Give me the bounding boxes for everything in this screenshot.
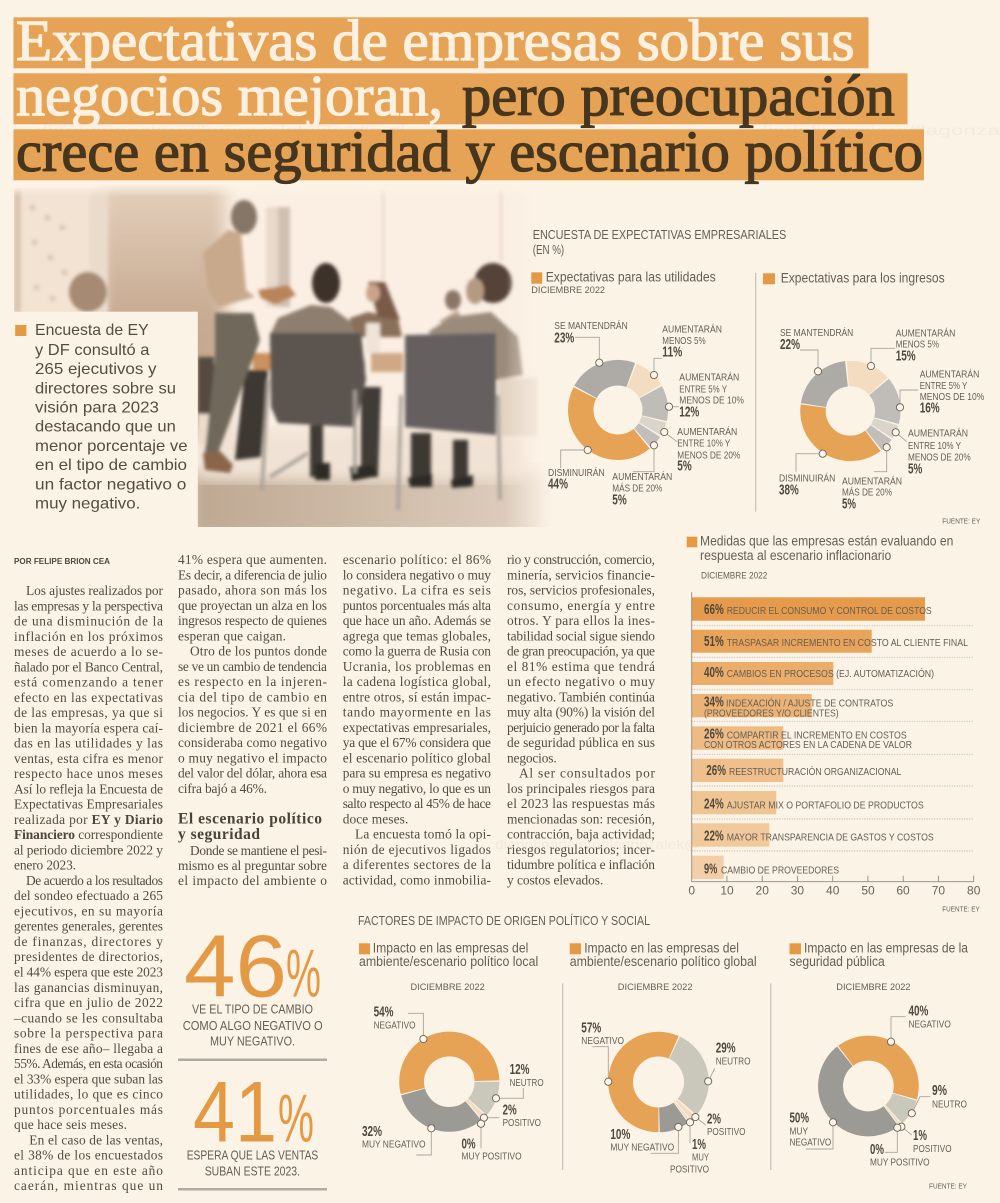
text block: column 1: las ganancias disminuyan, xyxy=(14,980,163,995)
panel: bar chart medidas: Medidas que las empresas están evaluando en xyxy=(700,534,953,549)
text block: column 1: gerentes generales, gerentes xyxy=(14,919,163,934)
text block: column 1: 55%. Además, en esta ocasión xyxy=(14,1056,163,1071)
text block: column 1: Expectativas Empresariales xyxy=(14,797,163,812)
text block: column 2: mismo es al preguntar sobre xyxy=(178,858,327,873)
stat: 46%: COMO ALGO NEGATIVO O xyxy=(183,1019,323,1033)
panel: impacto político local: MUY POSITIVO xyxy=(462,1150,522,1162)
stat: 46% xyxy=(178,917,327,1061)
text block: column 4: el 2023 las respuestas más xyxy=(507,796,655,811)
text block: column 1: efecto en las expectativas xyxy=(14,690,163,705)
byline: POR FELIPE BRION CEA xyxy=(14,556,110,566)
panel: expectativas para las utilidades: ENTRE 10% Y xyxy=(677,438,730,450)
text block: column 4: ros, servicios profesionales, xyxy=(507,582,655,598)
panel: bar chart medidas: 51% xyxy=(704,634,724,650)
text block: column 1: las empresas y la perspectiva xyxy=(14,598,163,613)
panel: expectativas para los ingresos: AUMENTARÁN xyxy=(896,327,955,340)
panel: expectativas para las utilidades: AUMENTARÁN xyxy=(662,322,722,335)
panel: bar chart medidas: 26% xyxy=(704,726,724,742)
panel: expectativas para los ingresos: Expectativas para los ingresos xyxy=(781,271,945,286)
text block: column 1: de finanzas, directores y xyxy=(14,934,163,949)
panel: expectativas para los ingresos: SE MANTENDRÁN xyxy=(780,326,853,339)
text block: column 1: al periodo diciembre 2022 y xyxy=(14,842,163,857)
panel: impacto político local: DICIEMBRE 2022 xyxy=(410,982,485,993)
panel: impacto político local: NEUTRO xyxy=(510,1077,544,1089)
panel: bar chart medidas: 22% xyxy=(704,829,724,845)
panel: expectativas para las utilidades: MENOS DE 10% xyxy=(679,394,744,406)
title xyxy=(14,8,924,184)
text block: column 3: que hace un año. Además se xyxy=(343,613,491,628)
panel: bar chart medidas: INDEXACIÓN / AJUSTE DE CONTRATOS xyxy=(726,697,893,710)
panel: bar chart medidas: FUENTE: EY xyxy=(942,905,980,914)
text block: column 1: sobre la perspectiva para xyxy=(14,1026,163,1040)
panel: impacto seguridad pública xyxy=(770,941,968,1190)
panel: impacto político local: 0% xyxy=(462,1136,476,1152)
panel: impacto político local: 2% xyxy=(503,1102,517,1118)
panel: impacto seguridad pública: 1% xyxy=(913,1128,927,1144)
panel: expectativas para los ingresos: DISMINUIRÁN xyxy=(779,472,835,485)
panel: expectativas para los ingresos: 16% xyxy=(920,400,940,416)
text block: column 1: Así lo refleja la Encuesta de xyxy=(14,781,163,796)
panel: expectativas para las utilidades: ENTRE 5% Y xyxy=(679,383,727,395)
panel: impacto político global: POSITIVO xyxy=(707,1126,746,1138)
callout: survey summary: y DF consultó a xyxy=(35,342,150,359)
text block: column 4: los principales riesgos para xyxy=(507,781,655,796)
heading: el escenario político y seguridad: y seguridad xyxy=(178,826,260,843)
text block: column 4: rio y construcción, comercio, xyxy=(507,552,655,567)
panel: impacto político local: Impacto en las empresas del xyxy=(373,941,528,956)
panel: bar chart medidas: 70 xyxy=(932,883,945,897)
panel: expectativas para las utilidades: DISMINUIRÁN xyxy=(548,466,605,479)
faint watermark: diariofinanciero#lagonza xyxy=(755,122,1000,138)
text block: column 3: para su empresa es negativo xyxy=(343,766,491,781)
panel: impacto político global: 57% xyxy=(581,1020,601,1036)
panel: expectativas para los ingresos: MENOS DE 10% xyxy=(920,391,984,403)
panel: expectativas para las utilidades: MÁS DE 20% xyxy=(612,482,662,495)
panel: bar chart medidas: 0 xyxy=(688,883,695,897)
panel: bar chart medidas: COMPARTIR EL INCREMENTO EN COSTOS xyxy=(727,729,907,741)
heading: encuesta de expectativas: ENCUESTA DE EXPECTATIVAS EMPRESARIALES xyxy=(533,228,786,242)
text block: column 3: o muy negativo, lo que es un xyxy=(343,781,491,796)
text block: column 4: riesgos regulatorios; incer- xyxy=(507,842,655,857)
text block: column 2: diciembre de 2021 el 66% xyxy=(178,720,327,735)
text block: column 4: de seguridad pública en sus xyxy=(507,735,655,750)
text block: column 1: el 44% espera que este 2023 xyxy=(14,964,163,980)
stat: 41%: SUBAN ESTE 2023. xyxy=(205,1164,300,1178)
stat: 46%: VE EL TIPO DE CAMBIO xyxy=(192,1002,313,1016)
heading: factores de impacto: FACTORES DE IMPACTO DE ORIGEN POLÍTICO Y SOCIAL xyxy=(358,913,650,928)
text block: column 2: ingresos respecto de quienes xyxy=(178,613,327,628)
stat: 46%: MUY NEGATIVO. xyxy=(210,1035,295,1049)
text block: column 1: respecto hace unos meses xyxy=(14,766,163,781)
panel: impacto político local: ambiente/escenario político local xyxy=(359,954,538,969)
stat: 41%: ESPERA QUE LAS VENTAS xyxy=(187,1148,318,1162)
text block: column 3: doce meses. xyxy=(343,811,408,826)
text block: column 2: que proyectan un alza en los xyxy=(178,598,327,613)
text block: column 3: lo considera negativo o muy xyxy=(343,567,491,582)
panel: expectativas para las utilidades: Expectativas para las utilidades xyxy=(546,270,716,285)
panel: expectativas para los ingresos: ENTRE 5% Y xyxy=(920,380,967,392)
text block: column 2: consideraba como negativo xyxy=(178,735,327,750)
text block: column 1: inflación en los próximos xyxy=(14,629,163,644)
panel: impacto seguridad pública: 0% xyxy=(870,1142,884,1158)
text block: column 1: ejecutivos, en su mayoría xyxy=(14,904,163,918)
text block: column 1: realizada por EY y Diario xyxy=(14,812,163,827)
panel: impacto seguridad pública: 40% xyxy=(908,1004,928,1020)
panel: impacto político global: ambiente/escenario político global xyxy=(570,954,757,969)
text block: column 2: del valor del dólar, ahora esa xyxy=(178,766,327,781)
panel: expectativas para las utilidades: 23% xyxy=(554,330,574,346)
text block: column 4: Al ser consultados por xyxy=(519,766,656,781)
stat: 41% xyxy=(178,1065,327,1190)
heading: encuesta de expectativas xyxy=(533,228,786,257)
panel: expectativas para los ingresos: AUMENTARÁN xyxy=(842,474,902,487)
panel: bar chart medidas: 40 xyxy=(826,883,840,897)
callout: survey summary: Encuesta de EY xyxy=(35,322,149,339)
title: negocios mejoran, xyxy=(16,63,443,128)
text block: column 2: el impacto del ambiente o xyxy=(178,873,327,888)
panel: expectativas para los ingresos: 22% xyxy=(780,337,800,353)
text block: column 1: bien la mayoría espera caí- xyxy=(14,720,163,735)
text block: column 4: tidumbre política e inflación xyxy=(507,857,655,872)
panel: impacto seguridad pública: NEUTRO xyxy=(932,1099,967,1111)
text block: column 1: de las empresas, ya que si xyxy=(14,705,163,720)
text block: column 1 xyxy=(13,583,164,1193)
text block: column 3: actividad, como inmobilia- xyxy=(343,872,491,888)
text block: column 2: o muy negativo el impacto xyxy=(178,750,327,765)
text block: column 1: caerán, mientras que un xyxy=(14,1178,163,1193)
panel: expectativas para las utilidades: SE MANTENDRÁN xyxy=(554,319,628,332)
text block: column 1: el 38% de los encuestados xyxy=(14,1148,163,1163)
panel: impacto político local: MUY NEGATIVO xyxy=(362,1138,426,1150)
text block: column 1: presidentes de directorios, xyxy=(14,949,163,964)
text block: column 1: que hace seis meses. xyxy=(14,1117,127,1132)
text block: column 1: ñalado por el Banco Central, xyxy=(14,659,163,674)
panel: impacto seguridad pública: NEGATIVO xyxy=(790,1137,831,1149)
panel: bar chart medidas: respuesta al escenario inflacionario xyxy=(700,548,891,563)
panel: impacto seguridad pública: MUY xyxy=(790,1125,808,1137)
panel: impacto político global xyxy=(562,941,757,1175)
text block: column 2: pasado, ahora son más los xyxy=(178,582,327,598)
panel: expectativas para las utilidades: 12% xyxy=(679,404,699,420)
text block: column 4: mencionadas son: recesión, xyxy=(507,811,655,826)
text block: column 3 xyxy=(343,552,491,888)
stat: 46%: % xyxy=(286,936,321,1012)
text block: column 3: Ucrania, los problemas en xyxy=(343,659,491,674)
text block: column 2 xyxy=(178,552,327,888)
text block: column 2: Donde se mantiene el pesi- xyxy=(190,843,327,858)
panel: impacto seguridad pública: 9% xyxy=(932,1083,947,1099)
callout: survey summary: menor porcentaje ve xyxy=(35,438,188,455)
panel: expectativas para las utilidades: 5% xyxy=(677,459,692,475)
panel: bar chart medidas: CON OTROS ACTORES EN LA CADENA DE VALOR xyxy=(704,739,912,751)
text block: column 1: fines de ese año– llegaba a xyxy=(14,1041,163,1056)
panel: bar chart medidas: 66% xyxy=(704,602,724,618)
text block: column 1: del sondeo efectuado a 265 xyxy=(14,888,163,903)
text block: column 3: como la guerra de Rusia con xyxy=(343,644,491,659)
panel: bar chart medidas: CAMBIOS EN PROCESOS (EJ. AUTOMATIZACIÓN) xyxy=(727,667,934,680)
text block: column 2: se ve un cambio de tendencia xyxy=(178,659,327,674)
panel: impacto político global: POSITIVO xyxy=(670,1163,709,1175)
panel: bar chart medidas: AJUSTAR MIX O PORTAFOLIO DE PRODUCTOS xyxy=(727,799,924,811)
panel: expectativas para las utilidades: AUMENTARÁN xyxy=(677,425,737,438)
text block: column 4: negocios. xyxy=(507,750,557,765)
faint watermark: diariofinanciero#lagonzalek@ xyxy=(495,836,700,852)
text block: column 3: expectativas empresariales, xyxy=(343,720,491,735)
text block: column 3: a diferentes sectores de la xyxy=(343,857,491,872)
text block: column 1: cifra que en julio de 2022 xyxy=(14,995,163,1010)
panel: bar chart medidas: 20 xyxy=(756,883,769,897)
panel: expectativas para las utilidades: 5% xyxy=(612,492,627,508)
panel: expectativas para los ingresos: FUENTE: EY xyxy=(942,517,980,526)
callout: survey summary: un factor negativo o xyxy=(35,476,186,493)
panel: expectativas para las utilidades: 44% xyxy=(548,476,568,492)
panel: expectativas para las utilidades xyxy=(531,270,744,508)
stat: 41%: % xyxy=(278,1081,314,1157)
panel: bar chart medidas: 60 xyxy=(896,883,910,897)
text block: column 1: el 33% espera que suban las xyxy=(14,1071,163,1086)
text block: column 1: meses de acuerdo a lo se- xyxy=(14,644,163,659)
panel: expectativas para los ingresos: 38% xyxy=(779,482,799,498)
text block: column 1: ventas, esta cifra es menor xyxy=(14,751,164,766)
panel: bar chart medidas: MAYOR TRANSPARENCIA DE GASTOS Y COSTOS xyxy=(727,832,934,844)
panel: expectativas para las utilidades: AUMENTARÁN xyxy=(612,470,672,483)
text block: column 4: otros. Y para ellos la ines- xyxy=(507,613,655,628)
panel: expectativas para las utilidades: MENOS DE 20% xyxy=(677,449,740,461)
panel: impacto político global: MUY NEGATIVO xyxy=(610,1142,674,1154)
text block: column 1: Los ajustes realizados por xyxy=(26,583,164,598)
panel: expectativas para las utilidades: AUMENTARÁN xyxy=(679,371,739,384)
panel: impacto seguridad pública: POSITIVO xyxy=(913,1143,952,1155)
panel: expectativas para las utilidades: DICIEMBRE 2022 xyxy=(531,285,605,296)
text block: column 1: de una disminución de la xyxy=(14,614,163,628)
panel: bar chart medidas: 24% xyxy=(704,796,724,812)
callout: survey summary: en el tipo de cambio xyxy=(35,457,187,474)
text block: column 4: un efecto negativo o muy xyxy=(507,674,655,689)
panel: impacto político local: 12% xyxy=(510,1062,530,1078)
panel: impacto seguridad pública: Impacto en las empresas de la xyxy=(804,941,968,956)
text block: column 3: agrega que temas globales, xyxy=(343,628,491,643)
panel: impacto político local: NEGATIVO xyxy=(374,1019,416,1031)
panel: impacto seguridad pública: MUY POSITIVO xyxy=(870,1157,930,1169)
text block: column 3: escenario político: el 86% xyxy=(343,552,491,567)
text block: column 3: La encuesta tomó la opi- xyxy=(355,827,491,842)
text block: column 4: negativo. También continúa xyxy=(507,689,655,704)
text block: column 2: cifra bajó a 46%. xyxy=(178,781,267,796)
text block: column 3: tando mayormente en las xyxy=(343,705,491,720)
panel: expectativas para los ingresos: ENTRE 10% Y xyxy=(908,440,961,452)
callout: survey summary: muy negativo. xyxy=(35,495,140,512)
text block: column 4: contracción, baja actividad; xyxy=(507,827,655,842)
panel: expectativas para los ingresos: 5% xyxy=(842,496,856,512)
panel: expectativas para los ingresos: AUMENTARÁN xyxy=(908,427,968,440)
text block: column 4: muy alta (90%) la visión del xyxy=(507,705,655,720)
panel: expectativas para los ingresos: 15% xyxy=(896,349,916,365)
panel: impacto político local: 54% xyxy=(374,1005,394,1021)
callout: survey summary: visión para 2023 xyxy=(35,400,159,417)
panel: impacto político global: NEGATIVO xyxy=(581,1035,624,1047)
text block: column 2: cia del tipo de cambio en xyxy=(178,689,327,704)
stat: 46%: 46 xyxy=(184,917,287,1016)
text block: column 2: Es decir, a diferencia de julio xyxy=(178,567,327,582)
text block: column 4: de gran preocupación, ya que xyxy=(507,644,655,659)
panel: bar chart medidas: (PROVEEDORES Y/O CLIENTES) xyxy=(704,708,839,720)
text block: column 4 xyxy=(507,552,656,888)
text block: column 2: es respecto en la injeren- xyxy=(178,674,327,689)
text block: column 4: minería, servicios financie- xyxy=(507,567,655,582)
text block: column 1: puntos porcentuales más xyxy=(14,1102,163,1117)
panel: impacto político global: 2% xyxy=(707,1111,721,1127)
title: crece en seguridad y escenario político xyxy=(16,119,923,184)
panel: impacto seguridad pública: FUENTE: EY xyxy=(929,1181,967,1190)
text block: column 3: puntos porcentuales más alta xyxy=(343,598,491,613)
heading: encuesta de expectativas: (EN %) xyxy=(533,243,564,257)
panel: bar chart medidas: 26% xyxy=(706,763,726,779)
panel: impacto político global: Impacto en las empresas del xyxy=(584,941,739,956)
text block: column 3: nión de ejecutivos ligados xyxy=(343,842,491,857)
text block: column 4: el 81% estima que tendrá xyxy=(507,659,655,674)
panel: expectativas para los ingresos: MENOS 5% xyxy=(896,339,939,351)
panel: expectativas para los ingresos: MÁS DE 20% xyxy=(842,486,892,499)
panel: bar chart medidas: REESTRUCTURACIÓN ORGANIZACIONAL xyxy=(729,765,901,778)
text block: column 1: está comenzando a tener xyxy=(14,675,164,690)
panel: bar chart medidas xyxy=(687,534,981,914)
panel: impacto político global: DICIEMBRE 2022 xyxy=(618,982,692,993)
callout: survey summary: destacando que un xyxy=(35,419,176,436)
panel: impacto seguridad pública: DICIEMBRE 2022 xyxy=(836,982,910,993)
panel: bar chart medidas: 30 xyxy=(791,883,804,897)
faint watermark xyxy=(35,122,1000,852)
panel: impacto seguridad pública: NEGATIVO xyxy=(908,1018,951,1030)
callout: survey summary: 265 ejecutivos y xyxy=(35,361,156,378)
panel: impacto seguridad pública: seguridad pública xyxy=(790,954,885,969)
panel: expectativas para las utilidades: 11% xyxy=(662,345,682,361)
text block: column 1: enero 2023. xyxy=(14,858,76,873)
faint watermark: diariofinanciero#lagonzalek@e-dip.cl xyxy=(35,122,405,138)
text block: column 2: los negocios. Y es que si en xyxy=(178,705,327,720)
text block: column 3: salto respecto al 45% de hace xyxy=(343,796,491,811)
text block: column 1: –cuando se les consultaba xyxy=(13,1010,163,1025)
text block: column 4: y costos elevados. xyxy=(507,872,603,888)
text block: column 2: 41% espera que aumenten. xyxy=(178,552,327,567)
text block: column 2: esperan que caigan. xyxy=(178,628,286,643)
heading: el escenario político y seguridad xyxy=(178,810,322,843)
text block: column 3: negativo. La cifra es seis xyxy=(343,582,491,598)
text block: column 3: entre otros, sí están impac- xyxy=(343,689,491,704)
panel: expectativas para los ingresos xyxy=(755,271,984,526)
title: pero preocupación xyxy=(462,63,895,128)
panel: impacto político global: 10% xyxy=(610,1127,630,1143)
panel: bar chart medidas: 40% xyxy=(704,665,724,681)
panel: impacto político local xyxy=(359,941,544,1162)
panel: impacto político local: POSITIVO xyxy=(503,1117,541,1129)
text block: column 3: ya que el 67% considera que xyxy=(343,735,491,750)
text block: column 1: das en las utilidades y las xyxy=(14,736,163,751)
text block: column 4: perjuicio generado por la falta xyxy=(507,720,655,735)
photo: blurred business meeting xyxy=(14,175,554,540)
text block: column 4: consumo, energía y entre xyxy=(507,598,655,613)
panel: expectativas para los ingresos: AUMENTARÁN xyxy=(920,367,979,380)
stat: 41%: 41 xyxy=(193,1065,277,1161)
panel: bar chart medidas: REDUCIR EL CONSUMO Y CONTROL DE COSTOS xyxy=(727,605,932,617)
title: Expectativas de empresas sobre sus xyxy=(16,8,855,73)
panel: impacto seguridad pública: 50% xyxy=(790,1110,809,1126)
panel: bar chart medidas: 9% xyxy=(704,861,717,877)
panel: bar chart medidas: 50 xyxy=(861,883,875,897)
text block: column 3: el escenario político global xyxy=(343,750,491,765)
text block: column 2: Otro de los puntos donde xyxy=(190,644,327,659)
panel: expectativas para los ingresos: 5% xyxy=(908,461,922,477)
panel: impacto político global: 29% xyxy=(716,1041,736,1057)
panel: impacto político local: 32% xyxy=(362,1124,382,1140)
callout: survey summary xyxy=(14,312,198,528)
text block: column 1: En el caso de las ventas, xyxy=(29,1132,163,1147)
text block: column 4: tabilidad social sigue siendo xyxy=(507,628,655,643)
text block: column 1: De acuerdo a los resultados xyxy=(26,873,163,888)
text block: column 1: Financiero correspondiente xyxy=(14,827,163,842)
text block: column 1: anticipa que en este año xyxy=(14,1163,163,1178)
panel: impacto político global: MUY xyxy=(692,1152,709,1164)
panel: bar chart medidas: 10 xyxy=(720,883,734,897)
heading: el escenario político y seguridad: El escenario político xyxy=(178,810,322,827)
callout: survey summary: directores sobre su xyxy=(35,380,176,397)
panel: bar chart medidas: DICIEMBRE 2022 xyxy=(701,571,767,582)
panel: expectativas para las utilidades: MENOS 5% xyxy=(662,335,706,347)
panel: impacto político global: 1% xyxy=(692,1137,706,1153)
panel: bar chart medidas: 80 xyxy=(967,883,981,897)
text block: column 1: utilidades, lo que es cinco xyxy=(14,1087,163,1102)
panel: bar chart medidas: 34% xyxy=(704,695,724,711)
panel: expectativas para los ingresos: MENOS DE 20% xyxy=(908,451,971,463)
text block: column 3: la cadena logística global, xyxy=(343,674,491,689)
panel: bar chart medidas: CAMBIO DE PROVEEDORES xyxy=(721,864,839,876)
panel: impacto político global: NEUTRO xyxy=(716,1055,750,1067)
